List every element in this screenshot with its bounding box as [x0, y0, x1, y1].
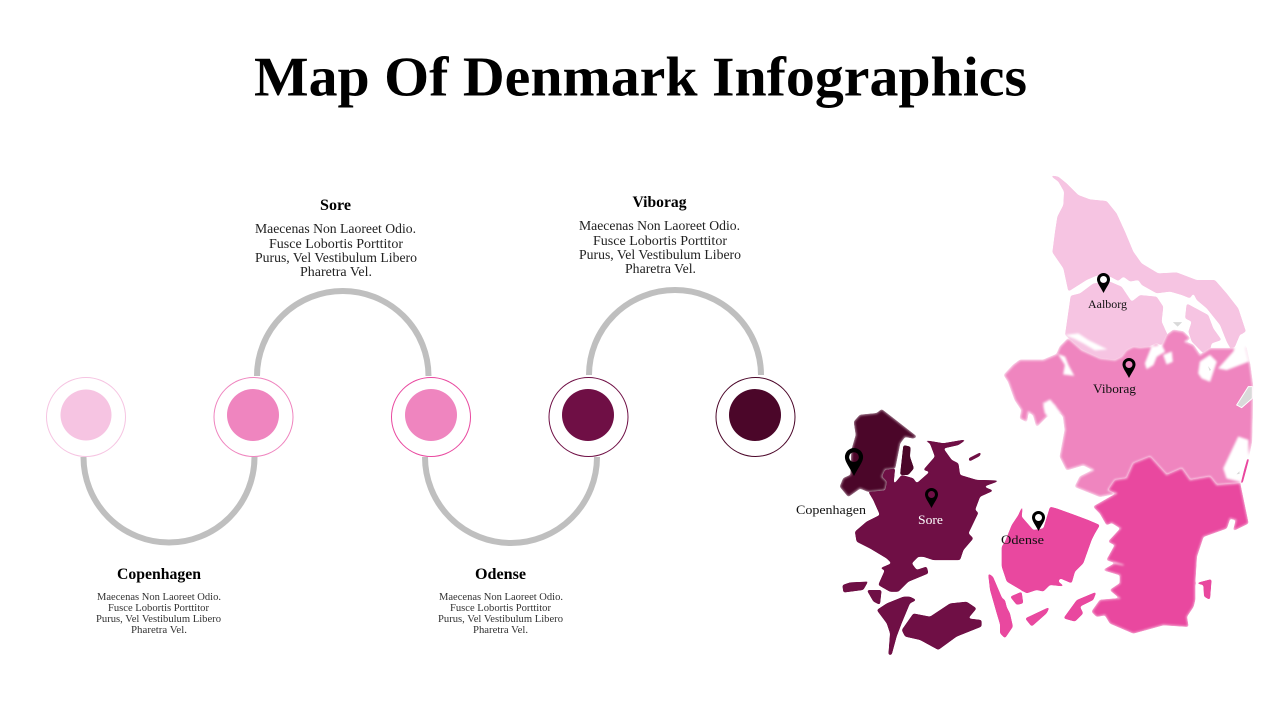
pin: Sore [925, 488, 938, 508]
text block: Copenhagen: Fusce Lobortis Porttitor [108, 603, 210, 614]
text block: Odense [438, 566, 563, 636]
central lobe [1065, 282, 1168, 362]
text block: Viborag: Viborag [632, 194, 687, 211]
region: Viborag [1004, 330, 1253, 497]
text block: Viborag: Fusce Lobortis Porttitor [593, 233, 728, 248]
arc: Copenhagen to Sore [84, 457, 254, 542]
title: Map Of Denmark Infographics [254, 46, 1027, 108]
node 5 [716, 378, 795, 456]
arc: Odense to Viborag [425, 457, 597, 543]
arc: Viborag to Aalborg [589, 290, 761, 375]
node 1 [46, 378, 126, 456]
label: Sore: Sore [918, 512, 943, 527]
text block: Sore: Sore [320, 197, 351, 214]
text block: Odense: Purus, Vel Vestibulum Libero [438, 614, 563, 625]
arc: Sore to Odense [257, 291, 428, 376]
peninsulas [1000, 592, 1097, 638]
pin: Odense [1032, 511, 1045, 531]
text block: Viborag: Maecenas Non Laoreet Odio. [579, 218, 740, 233]
small island [1195, 579, 1212, 600]
text block: Copenhagen: Copenhagen [117, 566, 201, 583]
fjord stripe [1065, 333, 1107, 350]
pin: Copenhagen [845, 448, 863, 476]
text block: Sore: Purus, Vel Vestibulum Libero [255, 250, 417, 265]
inland lakes [1172, 322, 1252, 475]
small peninsula [900, 445, 914, 475]
map of Denmark [796, 175, 1253, 655]
text block: Odense: Pharetra Vel. [473, 625, 528, 636]
label: Viborag: Viborag [1093, 381, 1137, 396]
text block: Sore: Maecenas Non Laoreet Odio. [255, 221, 416, 236]
label: Aalborg: Aalborg [1088, 299, 1127, 311]
label: Odense: Odense [1001, 532, 1044, 547]
region: Copenhagen [840, 409, 917, 497]
text block: Viborag: Purus, Vel Vestibulum Libero [579, 247, 741, 262]
text block: Viborag [579, 194, 741, 276]
text block: Odense: Fusce Lobortis Porttitor [450, 603, 552, 614]
label: Copenhagen: Copenhagen [796, 502, 867, 517]
Fyn [1002, 503, 1100, 593]
text block: Copenhagen: Maecenas Non Laoreet Odio. [97, 592, 221, 603]
north part [1049, 175, 1246, 349]
region: Odense [988, 457, 1248, 638]
region: Sore [842, 439, 1000, 655]
south Jutland [1092, 457, 1248, 633]
east lobe [1185, 303, 1222, 353]
node 3 [392, 378, 470, 456]
pin: Viborag [1122, 358, 1136, 378]
text block: Viborag: Pharetra Vel. [625, 261, 696, 276]
text block: Copenhagen: Pharetra Vel. [131, 625, 187, 636]
node 2 [214, 378, 293, 456]
southern islands [842, 452, 982, 655]
text block: Odense: Odense [475, 566, 526, 583]
text block: Copenhagen [96, 566, 221, 636]
east strip [1242, 458, 1248, 483]
text block: Sore [255, 197, 417, 279]
text block: Copenhagen: Purus, Vel Vestibulum Libero [96, 614, 221, 625]
text block: Sore: Fusce Lobortis Porttitor [269, 236, 404, 251]
timeline: connecting arcs and nodes [46, 290, 795, 543]
text block: Sore: Pharetra Vel. [300, 264, 372, 279]
bay cut-outs [1043, 333, 1248, 482]
pin: Aalborg [1097, 273, 1110, 293]
west strip [988, 573, 1013, 638]
region: Aalborg [1049, 175, 1246, 362]
text block: Odense: Maecenas Non Laoreet Odio. [439, 592, 563, 603]
node 4 [549, 378, 628, 456]
